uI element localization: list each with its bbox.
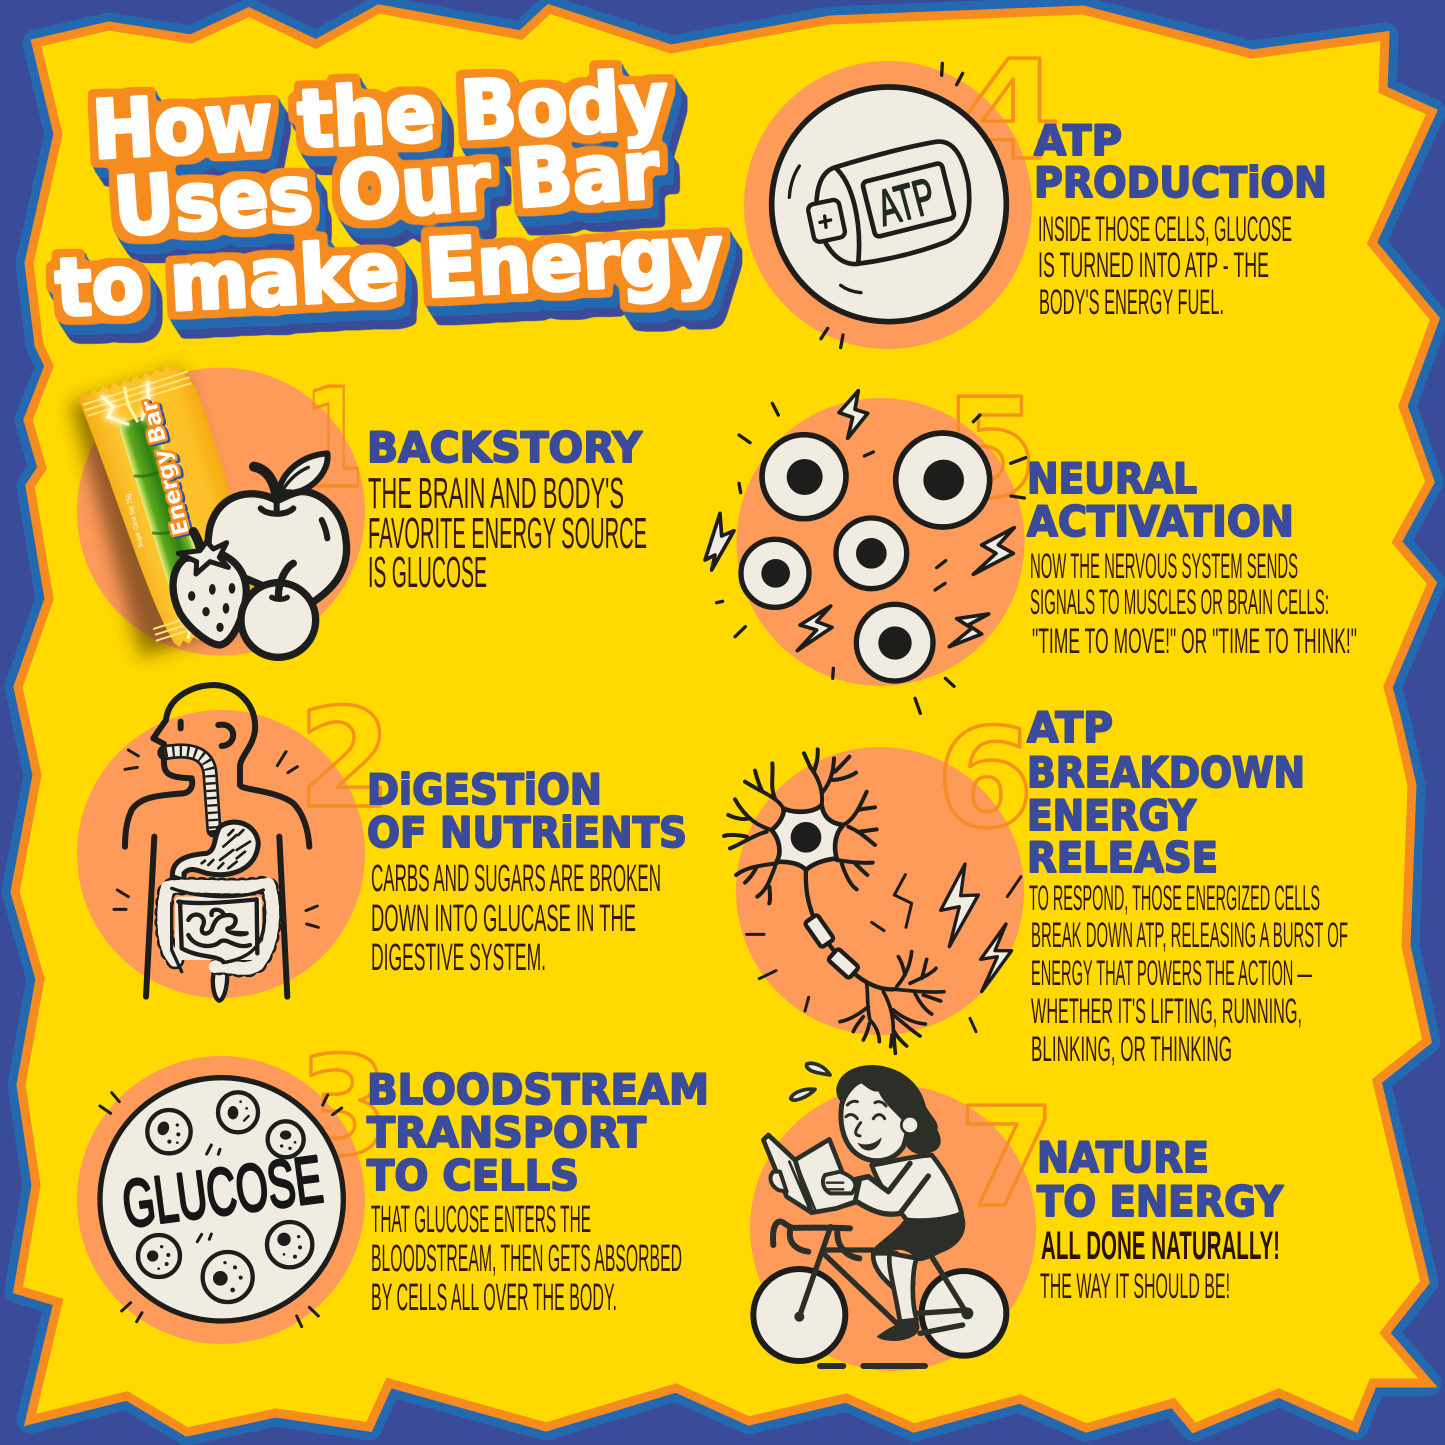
icon: neuron <box>724 749 1021 1053</box>
bar label: Energy Bar <box>137 398 195 538</box>
text: FAVORITE ENERGY SOURCE <box>368 509 647 558</box>
product shadow <box>71 369 251 657</box>
number 2: 2 <box>298 680 392 839</box>
heading: atp breakdown: ENERGY <box>1027 791 1197 840</box>
text: atp production: BODY'S ENERGY FUEL. <box>1039 283 1224 322</box>
text: CARBS AND SUGARS ARE BROKEN <box>371 858 661 900</box>
glucose label: GLUCOSE <box>118 1143 327 1242</box>
circle 5 <box>736 398 1024 686</box>
circle 4 <box>744 61 1032 349</box>
heading: digestion: DiGESTiON <box>367 765 602 814</box>
text: nature to energy: THE WAY IT SHOULD BE! <box>1040 1267 1230 1306</box>
text: backstory: IS GLUCOSE <box>368 548 487 597</box>
heading: atp production: ATP <box>1034 116 1122 165</box>
heading: atp breakdown: BREAKDOWN <box>1027 748 1305 797</box>
title <box>53 54 725 335</box>
atp label: ATP <box>871 167 941 237</box>
step 4: atp production <box>744 32 1327 349</box>
heading: backstory: BACKSTORY <box>367 423 643 472</box>
heading: nature to energy: NATURE <box>1037 1133 1209 1182</box>
number 4: 4 <box>958 32 1062 191</box>
heading: digestion: OF NUTRiENTS <box>367 808 687 857</box>
text: bloodstream <box>371 1199 682 1319</box>
step 2: digestion <box>77 680 687 1001</box>
title: to make Energy <box>53 207 725 335</box>
step 5: neural activation <box>705 370 1357 713</box>
number 5: 5 <box>944 370 1038 529</box>
number 7: 7 <box>958 1079 1056 1238</box>
step 1: backstory <box>71 359 647 657</box>
heading: atp breakdown: ATP <box>1027 703 1113 752</box>
circle 6 <box>736 747 1024 1035</box>
text: atp production <box>1038 210 1292 322</box>
text: digestion <box>371 858 661 979</box>
heading: atp production <box>1034 116 1327 207</box>
text: atp breakdown: BLINKING, OR THINKING <box>1031 1030 1232 1069</box>
text: backstory: THE BRAIN AND BODY'S <box>368 469 624 518</box>
bar small print: Sugar Cane Bar 25g <box>125 493 145 548</box>
icon: glucose cells <box>100 1078 343 1327</box>
heading: nature to energy: TO ENERGY <box>1037 1177 1284 1226</box>
title: Uses Our Bar <box>111 123 663 254</box>
heading: bloodstream <box>367 1065 709 1200</box>
heading: atp breakdown: RELEASE <box>1027 833 1218 882</box>
heading: bloodstream: BLOODSTREAM <box>367 1065 709 1114</box>
text: backstory <box>368 469 647 597</box>
title: How the Body <box>90 54 670 177</box>
heading: neural activation <box>1027 454 1294 546</box>
heading: atp production: PRODUCTiON <box>1034 158 1327 207</box>
number 1: 1 <box>304 360 364 519</box>
icon: atp battery <box>772 63 1006 348</box>
icon: digestive system <box>114 685 318 1001</box>
text: digestion: DIGESTIVE SYSTEM. <box>371 937 546 979</box>
step 6: atp breakdown <box>724 700 1348 1069</box>
step 3: bloodstream <box>77 1028 709 1344</box>
energy bar product <box>76 359 270 654</box>
circle 3 <box>77 1056 365 1344</box>
circle 1 <box>77 368 365 656</box>
number 6: 6 <box>936 700 1034 859</box>
icon: neural cells <box>705 391 1026 713</box>
icon: fruit <box>173 453 347 657</box>
icon: cyclist reading <box>753 1063 1006 1366</box>
heading: digestion <box>367 765 687 857</box>
text: neural activation <box>1030 547 1357 661</box>
text: bloodstream: BY CELLS ALL OVER THE BODY. <box>371 1277 617 1319</box>
heading: bloodstream: TO CELLS <box>367 1151 579 1200</box>
text: BLOODSTREAM, THEN GETS ABSORBED <box>371 1238 682 1280</box>
text: digestion: DOWN INTO GLUCASE IN THE <box>371 898 636 940</box>
heading: bloodstream: TRANSPORT <box>367 1108 646 1157</box>
step 7: nature to energy <box>750 1063 1284 1371</box>
text: nature to energy <box>1040 1224 1280 1306</box>
text: bloodstream: THAT GLUCOSE ENTERS THE <box>371 1199 591 1241</box>
circle 2 <box>77 710 365 998</box>
heading: neural activation: ACTIVATION <box>1027 497 1294 546</box>
text: atp breakdown <box>1029 879 1348 1069</box>
heading: atp breakdown <box>1027 703 1305 882</box>
number 3: 3 <box>298 1028 390 1187</box>
circle 7 <box>750 1085 1036 1371</box>
heading: neural activation: NEURAL <box>1027 454 1197 503</box>
heading: nature to energy <box>1037 1133 1284 1226</box>
